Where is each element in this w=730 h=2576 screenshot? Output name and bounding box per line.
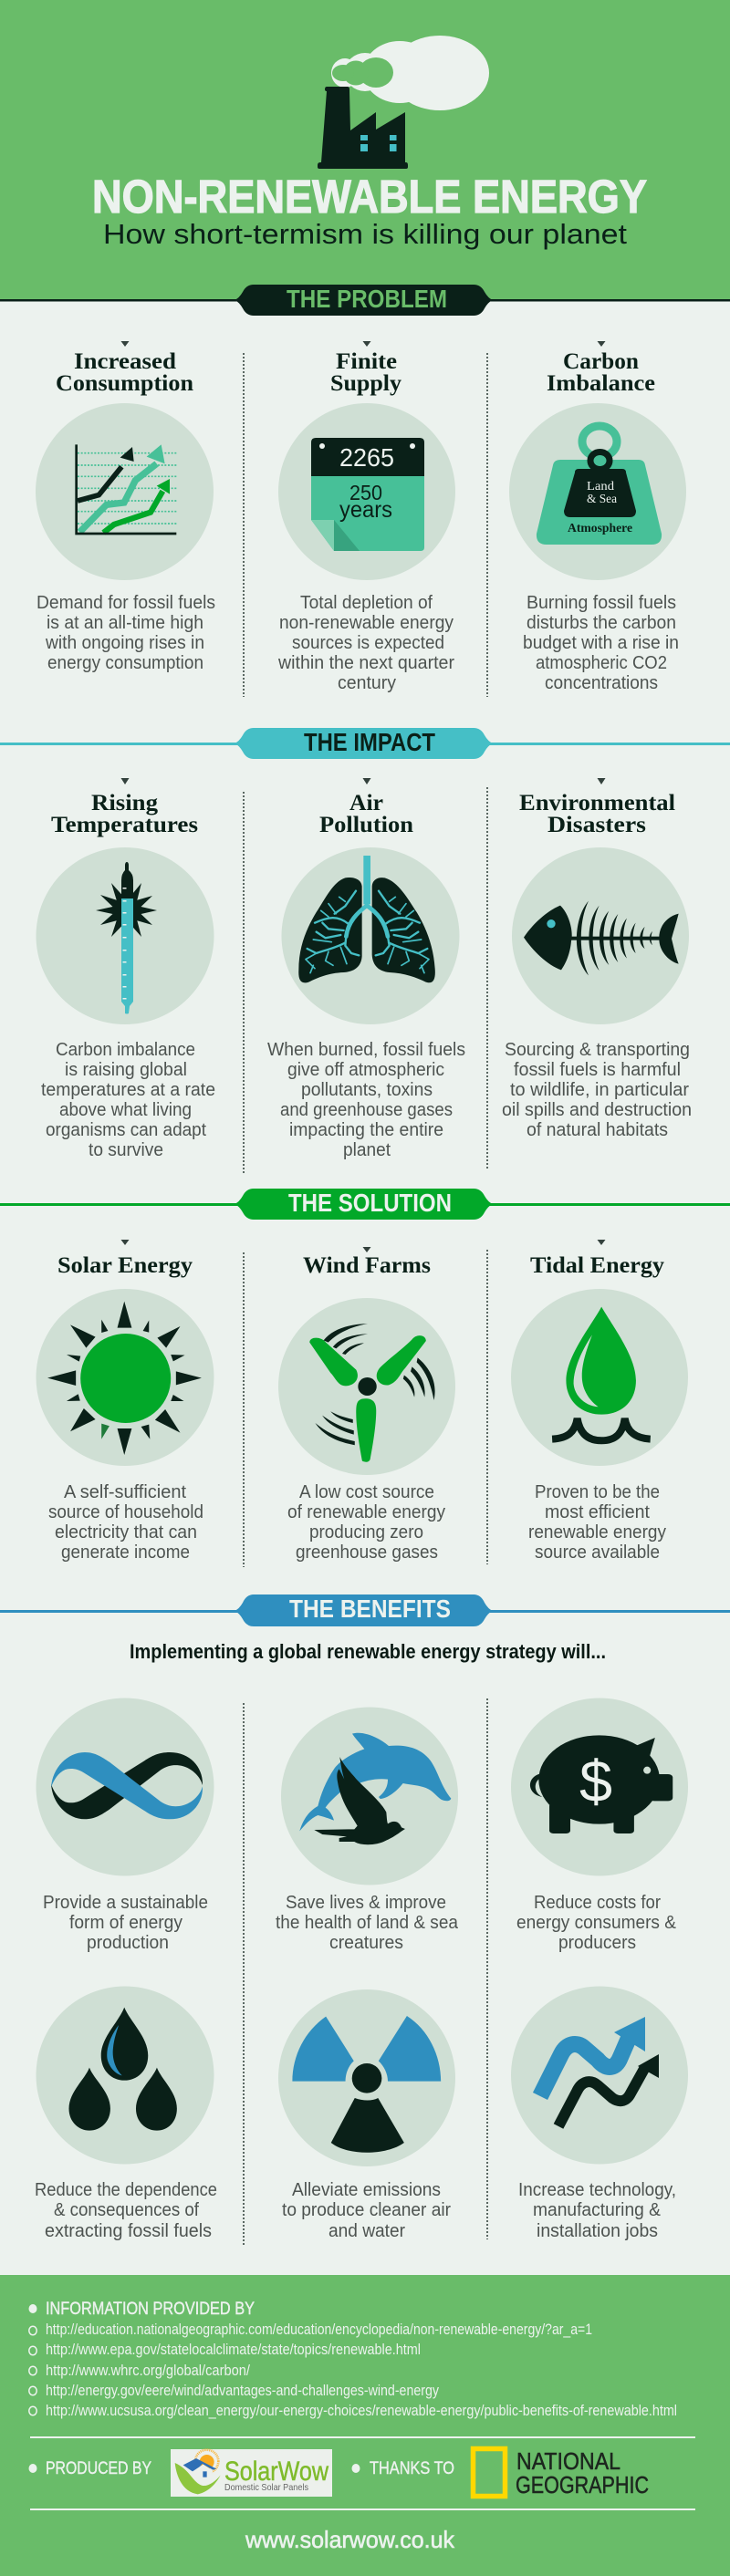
footer panel bbox=[0, 2275, 730, 2576]
text: reduce dependence: extracting fossil fuels bbox=[45, 2221, 212, 2241]
text: environmental disasters: Sourcing & transporting bbox=[505, 1040, 690, 1060]
benefit: save lives bbox=[276, 1708, 459, 1953]
icon: weight scale: Land bbox=[587, 480, 614, 493]
section banner: the impact bbox=[0, 728, 730, 759]
text: finite supply: sources is expected bbox=[292, 633, 444, 653]
text: wind farms: A low cost source bbox=[299, 1482, 434, 1502]
text: environmental disasters: of natural habitats bbox=[527, 1120, 668, 1140]
benefits intro text: Implementing a global renewable energy strategy will... bbox=[130, 1640, 606, 1663]
icon: piggy bank bbox=[511, 1698, 688, 1875]
heading: rising temperatures: Rising bbox=[91, 791, 159, 815]
text: carbon imbalance: Burning fossil fuels bbox=[527, 593, 676, 613]
column: air pollution bbox=[267, 778, 465, 1160]
text: solar energy: generate income bbox=[61, 1542, 190, 1563]
column: increased consumption bbox=[36, 341, 215, 673]
icon: piggy bank: $ bbox=[579, 1749, 612, 1814]
text: sustainable production: form of energy bbox=[69, 1913, 182, 1933]
text: increased consumption: Demand for fossil fuels bbox=[36, 593, 215, 613]
text: alleviate emissions: Alleviate emissions bbox=[292, 2180, 441, 2200]
text: reduce dependence: & consequences of bbox=[54, 2200, 199, 2220]
column: finite supply bbox=[277, 341, 455, 693]
column: environmental disasters bbox=[502, 778, 692, 1140]
text: air pollution: impacting the entire bbox=[289, 1120, 443, 1140]
heading: wind farms: Wind Farms bbox=[303, 1253, 431, 1278]
text: air pollution: give off atmospheric bbox=[287, 1060, 444, 1080]
information sources: http://energy.gov/eere/wind/advantages-and-challenges-wind-energy bbox=[46, 2383, 440, 2399]
text: tidal energy: Proven to be the bbox=[535, 1482, 660, 1502]
text: environmental disasters: oil spills and destruction bbox=[502, 1100, 692, 1120]
heading: environmental disasters: Disasters bbox=[548, 813, 646, 837]
text: sustainable production: Provide a sustainable bbox=[43, 1893, 208, 1913]
text: air pollution: When burned, fossil fuels bbox=[267, 1040, 465, 1060]
panel: the problem bbox=[36, 341, 686, 697]
text: air pollution: and greenhouse gases bbox=[280, 1100, 453, 1120]
produced by: PRODUCED BY bbox=[46, 2459, 151, 2478]
text: tidal energy: renewable energy bbox=[528, 1522, 666, 1542]
text: reduce costs: energy consumers & bbox=[516, 1913, 677, 1933]
icon: weight scale bbox=[509, 403, 686, 580]
text: increase jobs bbox=[518, 2180, 676, 2241]
text: carbon imbalance: atmospheric CO2 bbox=[536, 653, 667, 673]
thanks to: THANKS TO bbox=[370, 2459, 454, 2478]
logo: SolarWow: SolarWow bbox=[224, 2457, 328, 2487]
heading: rising temperatures bbox=[51, 791, 198, 837]
panel: the impact bbox=[36, 778, 692, 1174]
heading: finite supply: Supply bbox=[330, 371, 402, 396]
text: alleviate emissions: and water bbox=[328, 2221, 405, 2241]
icon: weight scale: Atmosphere bbox=[568, 522, 632, 535]
benefit: sustainable production bbox=[36, 1698, 214, 1953]
text: solar energy: electricity that can bbox=[55, 1522, 197, 1542]
column: wind farms bbox=[278, 1247, 455, 1563]
section banner: the impact: THE IMPACT bbox=[304, 728, 435, 756]
heading: air pollution bbox=[319, 791, 413, 837]
text: reduce dependence bbox=[35, 2180, 217, 2241]
text: environmental disasters: to wildlife, in particular bbox=[510, 1080, 689, 1100]
section banner: the solution bbox=[0, 1189, 730, 1220]
heading: tidal energy: Tidal Energy bbox=[530, 1253, 665, 1278]
heading: finite supply: Finite bbox=[336, 349, 397, 374]
column: solar energy bbox=[36, 1240, 214, 1563]
heading: increased consumption bbox=[56, 349, 193, 396]
text: wind farms: producing zero bbox=[309, 1522, 423, 1542]
benefit: increase jobs bbox=[511, 1987, 688, 2241]
heading: air pollution: Pollution bbox=[319, 813, 413, 837]
icon: water drop and waves bbox=[511, 1289, 688, 1466]
text: increase jobs: Increase technology, bbox=[518, 2180, 676, 2200]
heading: air pollution: Air bbox=[349, 791, 383, 815]
heading: increased consumption: Increased bbox=[74, 349, 176, 374]
section banner: the benefits: THE BENEFITS bbox=[289, 1594, 451, 1623]
text: finite supply: non-renewable energy bbox=[279, 613, 454, 633]
icon: rising arrows bbox=[511, 1987, 688, 2164]
text: save lives: the health of land & sea bbox=[276, 1913, 459, 1933]
section banner: the solution: THE SOLUTION bbox=[288, 1189, 452, 1217]
text: rising temperatures: to survive bbox=[89, 1140, 163, 1160]
header panel bbox=[0, 0, 730, 301]
text: rising temperatures: temperatures at a rate bbox=[41, 1080, 215, 1100]
heading: carbon imbalance: Imbalance bbox=[547, 371, 655, 396]
text: increase jobs: installation jobs bbox=[537, 2221, 658, 2241]
heading: carbon imbalance: Carbon bbox=[563, 349, 639, 374]
text: save lives bbox=[276, 1893, 459, 1953]
text: air pollution bbox=[267, 1040, 465, 1160]
column: rising temperatures bbox=[36, 778, 215, 1160]
text: finite supply bbox=[277, 593, 454, 693]
title: NON-RENEWABLE ENERGY bbox=[92, 171, 647, 223]
text: alleviate emissions bbox=[282, 2180, 451, 2241]
text: finite supply: century bbox=[338, 673, 396, 693]
benefit: reduce dependence bbox=[35, 1987, 217, 2241]
benefit: reduce costs bbox=[511, 1698, 688, 1953]
icon: lungs bbox=[281, 847, 460, 1024]
information sources bbox=[29, 2300, 677, 2419]
text: finite supply: within the next quarter bbox=[277, 653, 454, 673]
icon: infinity loop bbox=[36, 1698, 214, 1875]
information sources: INFORMATION PROVIDED BY bbox=[46, 2300, 255, 2319]
logo: National Geographic: NATIONAL bbox=[516, 2447, 620, 2475]
text: reduce costs: producers bbox=[558, 1933, 636, 1953]
icon: fish skeleton bbox=[512, 847, 689, 1024]
text: sustainable production bbox=[43, 1893, 208, 1953]
text: rising temperatures: above what living bbox=[59, 1100, 192, 1120]
text: increased consumption: energy consumption bbox=[47, 653, 203, 673]
text: reduce dependence: Reduce the dependence bbox=[35, 2180, 217, 2200]
benefit: alleviate emissions bbox=[278, 1989, 455, 2241]
text: tidal energy: source available bbox=[535, 1542, 660, 1563]
text: air pollution: planet bbox=[343, 1140, 391, 1160]
logo: National Geographic bbox=[473, 2447, 649, 2498]
heading: environmental disasters: Environmental bbox=[519, 791, 675, 815]
icon: rising line chart bbox=[36, 403, 214, 580]
information sources: http://education.nationalgeographic.com/education/encyclopedia/non-renewable-energy/?ar_a=1 bbox=[46, 2322, 592, 2338]
text: carbon imbalance bbox=[523, 593, 679, 693]
text: rising temperatures: is raising global bbox=[65, 1060, 187, 1080]
text: solar energy: source of household bbox=[48, 1502, 203, 1522]
logo: National Geographic: GEOGRAPHIC bbox=[516, 2471, 649, 2498]
logo: SolarWow bbox=[171, 2449, 332, 2497]
text: rising temperatures bbox=[41, 1040, 215, 1160]
text: air pollution: pollutants, toxins bbox=[301, 1080, 433, 1100]
text: sustainable production: production bbox=[87, 1933, 169, 1953]
section banner: the problem: THE PROBLEM bbox=[287, 285, 447, 313]
text: save lives: creatures bbox=[329, 1933, 403, 1953]
icon: wind turbine bbox=[278, 1298, 455, 1475]
text: increased consumption bbox=[36, 593, 215, 673]
text: save lives: Save lives & improve bbox=[286, 1893, 446, 1913]
heading: solar energy: Solar Energy bbox=[57, 1253, 193, 1278]
text: tidal energy: most efficient bbox=[545, 1502, 650, 1522]
icon: radiation symbol bbox=[278, 1989, 455, 2166]
text: environmental disasters bbox=[502, 1040, 692, 1140]
panel: the solution bbox=[36, 1240, 688, 1567]
text: rising temperatures: Carbon imbalance bbox=[56, 1040, 195, 1060]
heading: rising temperatures: Temperatures bbox=[51, 813, 198, 837]
column: tidal energy bbox=[511, 1240, 688, 1563]
text: increase jobs: manufacturing & bbox=[533, 2200, 662, 2220]
information sources: http://www.epa.gov/statelocalclimate/state/topics/renewable.html bbox=[46, 2342, 421, 2358]
icon: sun bbox=[36, 1289, 214, 1466]
text: wind farms bbox=[287, 1482, 445, 1563]
text: carbon imbalance: disturbs the carbon bbox=[527, 613, 676, 633]
icon: factory with smoke bbox=[318, 36, 489, 169]
heading: carbon imbalance bbox=[547, 349, 655, 396]
icon: thermometer bbox=[36, 847, 214, 1024]
section banner: the benefits bbox=[0, 1594, 730, 1626]
column: carbon imbalance bbox=[509, 341, 686, 693]
icon: calendar: 250 bbox=[349, 481, 382, 504]
icon: calendar bbox=[278, 403, 455, 580]
logo: SolarWow: Domestic Solar Panels bbox=[224, 2482, 308, 2493]
text: increased consumption: with ongoing rises in bbox=[45, 633, 204, 653]
icon: dolphin and bird bbox=[281, 1708, 458, 1885]
text: environmental disasters: fossil fuels is harmful bbox=[514, 1060, 681, 1080]
text: alleviate emissions: to produce cleaner air bbox=[282, 2200, 451, 2220]
heading: environmental disasters bbox=[519, 791, 675, 837]
text: solar energy bbox=[48, 1482, 203, 1563]
icon: calendar: 2265 bbox=[339, 443, 394, 472]
text: solar energy: A self-sufficient bbox=[64, 1482, 186, 1502]
panel: the benefits bbox=[35, 1698, 688, 2246]
section banner: the problem bbox=[0, 285, 730, 316]
text: carbon imbalance: concentrations bbox=[545, 673, 658, 693]
text: increased consumption: is at an all-time high bbox=[47, 613, 203, 633]
icon: weight scale: & Sea bbox=[587, 493, 618, 506]
text: wind farms: greenhouse gases bbox=[296, 1542, 438, 1563]
heading: increased consumption: Consumption bbox=[56, 371, 193, 396]
heading: finite supply bbox=[330, 349, 402, 396]
text: carbon imbalance: budget with a rise in bbox=[523, 633, 679, 653]
icon: oil drops bbox=[36, 1987, 214, 2164]
text: reduce costs: Reduce costs for bbox=[534, 1893, 661, 1913]
text: rising temperatures: organisms can adapt bbox=[46, 1120, 206, 1140]
text: tidal energy bbox=[528, 1482, 666, 1563]
subtitle: How short-termism is killing our planet bbox=[103, 218, 627, 250]
text: finite supply: Total depletion of bbox=[300, 593, 433, 613]
text: reduce costs bbox=[516, 1893, 677, 1953]
information sources: http://www.whrc.org/global/carbon/ bbox=[46, 2363, 250, 2379]
text: wind farms: of renewable energy bbox=[287, 1502, 445, 1522]
icon: calendar: years bbox=[339, 497, 392, 523]
website url: www.solarwow.co.uk bbox=[245, 2526, 455, 2553]
